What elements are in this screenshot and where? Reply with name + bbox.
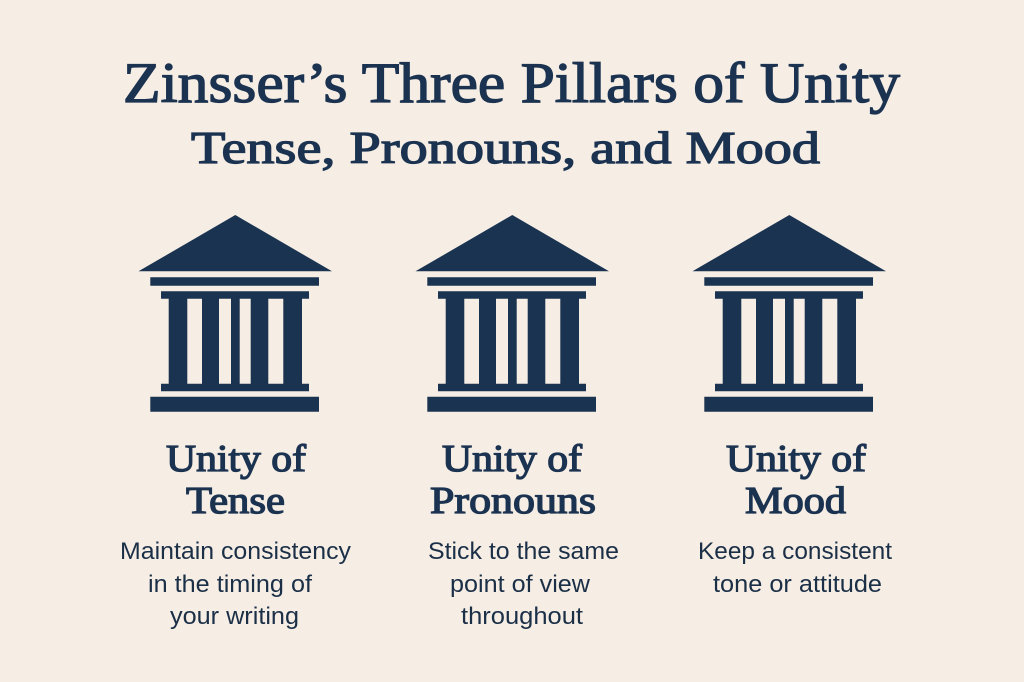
description: tense: Maintain consistency: [120, 538, 352, 565]
description: pronouns: Stick to the same: [428, 538, 619, 565]
heading: unity of mood: Mood: [745, 480, 846, 522]
panel: unity of pronouns: [416, 215, 619, 630]
title: Zinsser’s Three Pillars of Unity: [123, 52, 901, 115]
panel: unity of mood: [692, 215, 892, 598]
description: mood: [698, 538, 892, 598]
heading: unity of mood: Unity of: [726, 438, 866, 480]
description: pronouns: [428, 538, 619, 630]
description: pronouns: point of view: [450, 571, 590, 598]
heading: unity of tense: [166, 438, 306, 522]
panel: unity of tense: [120, 215, 352, 630]
description: tense: [120, 538, 352, 630]
heading: unity of tense: Tense: [186, 480, 285, 522]
icon: pillar building: [692, 215, 886, 412]
description: tense: in the timing of: [148, 571, 312, 598]
icon: pillar building: [416, 215, 609, 412]
description: pronouns: throughout: [461, 603, 583, 630]
heading: unity of pronouns: Pronouns: [430, 480, 596, 522]
description: mood: Keep a consistent: [698, 538, 892, 565]
heading: unity of pronouns: [430, 438, 596, 522]
heading: unity of tense: Unity of: [166, 438, 306, 480]
heading: unity of pronouns: Unity of: [442, 438, 582, 480]
heading: unity of mood: [726, 438, 866, 522]
subtitle: Tense, Pronouns, and Mood: [191, 122, 820, 173]
description: mood: tone or attitude: [713, 571, 882, 598]
description: tense: your writing: [170, 603, 299, 630]
icon: pillar building: [138, 215, 332, 412]
